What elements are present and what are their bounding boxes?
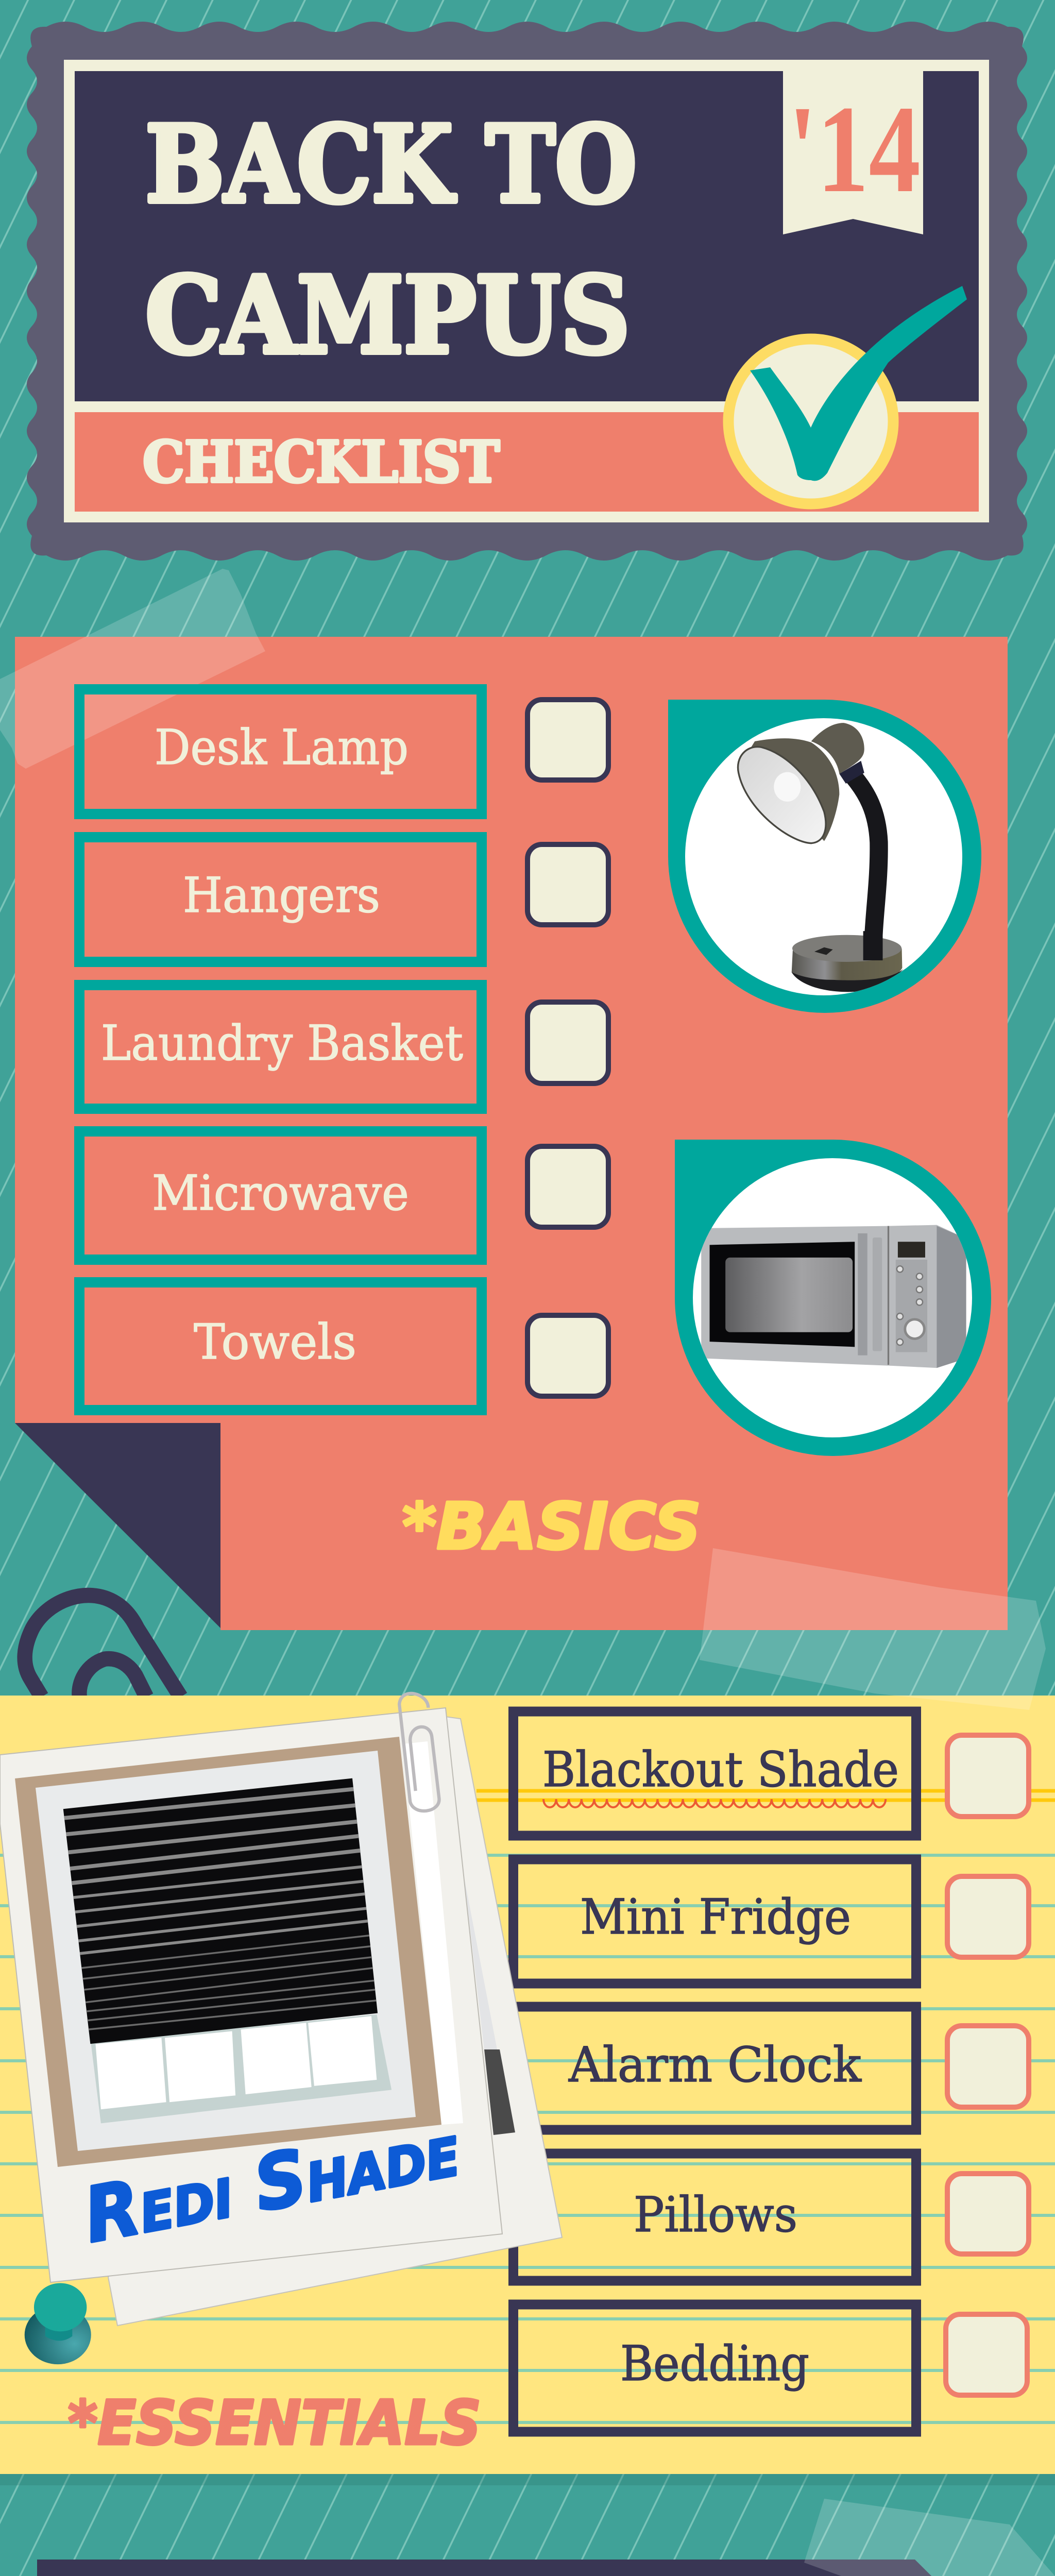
panel: essentials, ruled yellow paper <box>0 1548 1055 2576</box>
tape: basics top left <box>0 569 265 769</box>
scalloped stamp border <box>27 22 1027 561</box>
tan mat <box>15 1737 441 2167</box>
front card <box>0 1708 502 2282</box>
item: desk lamp <box>79 689 482 814</box>
item: pillows: Pillows <box>634 2187 797 2243</box>
photo: desk lamp <box>668 700 981 1013</box>
cream frame <box>64 60 989 522</box>
icon: check badge <box>728 286 967 504</box>
window panes <box>91 2014 392 2123</box>
item: pillows <box>513 2154 916 2281</box>
tape: basics bottom right <box>700 1548 1046 1710</box>
item: blackout shade: Blackout Shade <box>542 1742 899 1798</box>
header: back to campus stamp <box>27 22 1027 561</box>
section label: essentials: *ESSENTIALS <box>68 2388 481 2459</box>
checkboxes <box>946 1735 1029 2395</box>
item: desk lamp: Desk Lamp <box>155 720 409 776</box>
year text: '14 <box>788 79 921 218</box>
photo stack: redi shade <box>0 1693 562 2326</box>
handwritten label: redi shade: Redi Shade <box>78 2106 466 2260</box>
item: mini fridge: Mini Fridge <box>580 1889 851 1945</box>
ruled lines <box>0 1855 1055 2422</box>
item: mini fridge <box>513 1859 916 1984</box>
tape: extras top right <box>804 2499 1055 2576</box>
coral checklist band <box>75 412 979 512</box>
panel: basics <box>0 569 1008 1630</box>
shadow under paper <box>0 2474 1055 2485</box>
icon: large navy paperclip <box>25 1596 181 1697</box>
item: laundry basket <box>79 985 482 1109</box>
item: hangers <box>79 837 482 962</box>
item: hangers: Hangers <box>183 868 380 924</box>
item: microwave: Microwave <box>152 1165 409 1222</box>
ribbon with year <box>783 60 923 234</box>
title line 2: CAMPUS <box>145 254 630 378</box>
photo: microwave <box>675 1140 991 1456</box>
item: alarm clock: Alarm Clock <box>568 2037 862 2093</box>
navy title panel <box>75 71 979 401</box>
item: towels: Towels <box>194 1314 356 1370</box>
item: microwave <box>79 1131 482 1260</box>
item: towels <box>79 1282 482 1410</box>
blackout shade <box>63 1778 378 2044</box>
back photo strip <box>464 1877 515 2135</box>
item: alarm clock <box>513 2007 916 2130</box>
item: blackout shade <box>513 1711 916 1836</box>
yellow paper <box>0 1696 1055 2474</box>
window frame <box>36 1751 416 2151</box>
small paperclip <box>399 1693 439 1811</box>
navy sheet with cut corners <box>37 2560 1021 2576</box>
back card <box>108 1716 562 2326</box>
checkboxes <box>528 700 608 1396</box>
icon: teal push pin <box>25 2283 91 2364</box>
item: bedding <box>513 2304 916 2432</box>
title line 1: BACK TO <box>145 103 637 227</box>
item: laundry basket: Laundry Basket <box>101 1015 463 1072</box>
item: bedding: Bedding <box>620 2336 809 2392</box>
section label: basics: *BASICS <box>402 1489 701 1564</box>
white strip <box>403 1741 463 2125</box>
panel: extras <box>37 2560 1021 2576</box>
folded corner <box>15 1423 220 1628</box>
coral sheet with folded corner <box>15 637 1008 1630</box>
subtitle: CHECKLIST <box>143 429 500 495</box>
